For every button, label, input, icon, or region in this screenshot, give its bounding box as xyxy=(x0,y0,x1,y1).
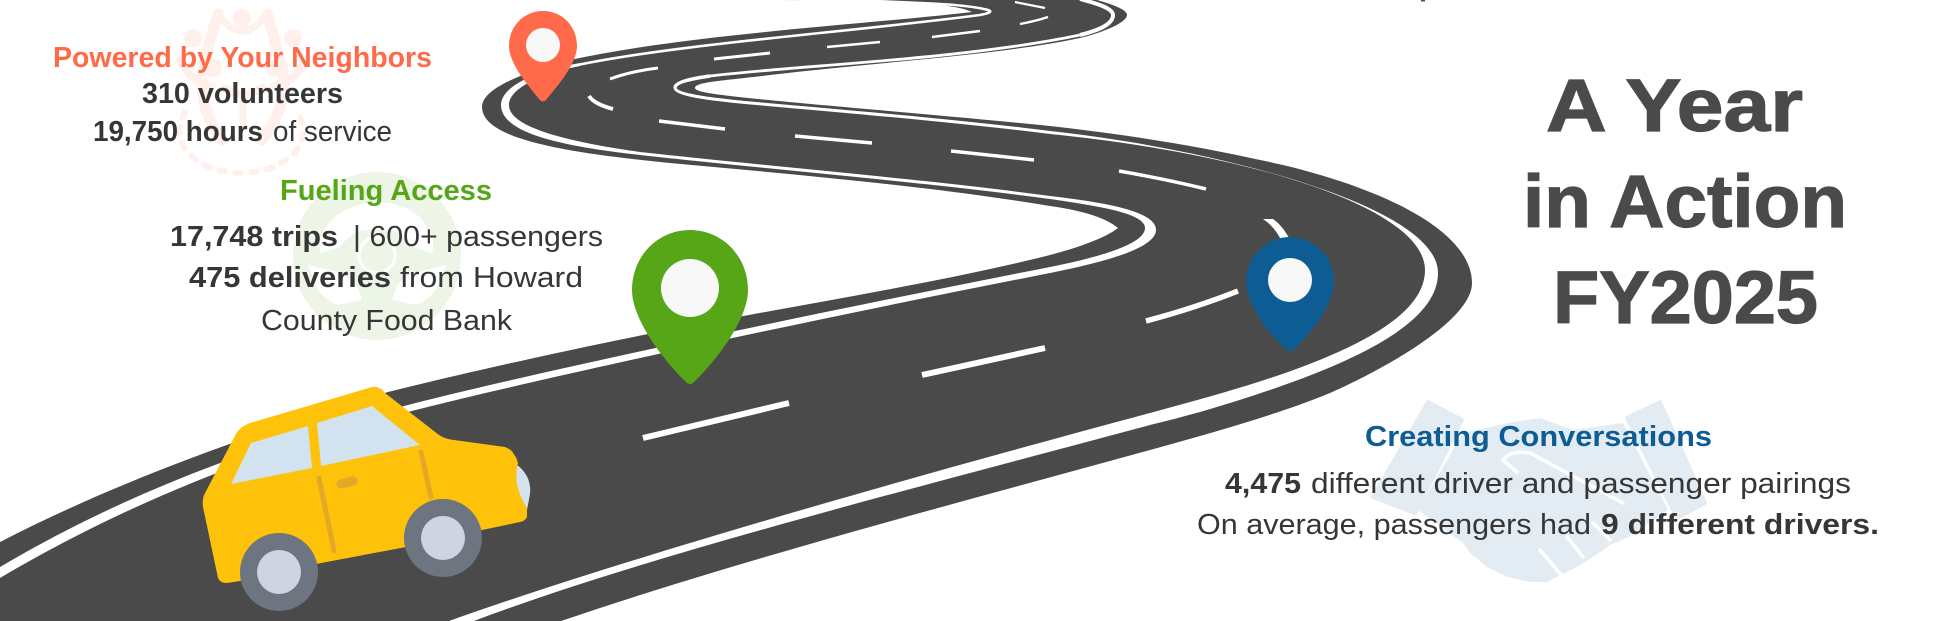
pairings: 4,475 xyxy=(1225,468,1301,500)
hours: of service xyxy=(273,116,392,148)
hours xyxy=(93,116,392,148)
food bank: County Food Bank xyxy=(261,305,513,337)
road edge line: upper xyxy=(0,0,1156,578)
car xyxy=(203,387,530,611)
volunteers: 310 volunteers xyxy=(142,78,343,110)
car front window xyxy=(317,406,420,466)
car headlight xyxy=(515,464,530,510)
car door lines and handle xyxy=(319,452,431,551)
title xyxy=(1523,64,1847,339)
road edge line: lower xyxy=(449,0,1438,621)
text block: fueling access xyxy=(170,175,603,337)
pairings: different driver and passenger pairings xyxy=(1311,468,1851,500)
text block: powered by your neighbors xyxy=(53,42,432,148)
icon: handshake watermark xyxy=(1373,402,1705,582)
deliveries: 475 deliveries xyxy=(189,262,391,294)
average drivers: On average, passengers had xyxy=(1197,509,1591,541)
heading: Powered by Your Neighbors xyxy=(53,42,432,74)
car front wheel xyxy=(404,499,482,577)
car rear window xyxy=(231,426,312,484)
map pin: blue xyxy=(1246,237,1334,352)
map pin: green xyxy=(632,230,748,384)
average drivers xyxy=(1197,509,1879,541)
car body xyxy=(203,387,527,583)
title: FY2025 xyxy=(1553,256,1818,339)
car rear wheel xyxy=(240,533,318,611)
icon: steering wheel watermark xyxy=(293,172,461,340)
deliveries: from Howard xyxy=(400,262,583,294)
road centre dashes xyxy=(589,2,1290,438)
icon: people watermark xyxy=(180,9,306,173)
hours: 19,750 hours xyxy=(93,116,263,148)
heading: Fueling Access xyxy=(280,175,492,207)
title: A Year xyxy=(1546,64,1803,147)
heading: Creating Conversations xyxy=(1365,421,1712,453)
small mark at top edge xyxy=(1421,0,1425,2)
deliveries xyxy=(189,262,583,294)
map pin: orange xyxy=(509,11,577,102)
text block: creating conversations xyxy=(1197,421,1879,541)
road xyxy=(0,0,1472,621)
road surface xyxy=(0,0,1472,621)
trips and passengers xyxy=(170,221,603,253)
average drivers: 9 different drivers. xyxy=(1601,509,1879,541)
title: in Action xyxy=(1523,160,1847,243)
trips and passengers: 17,748 trips xyxy=(170,221,338,253)
trips and passengers: | 600+ passengers xyxy=(353,221,603,253)
